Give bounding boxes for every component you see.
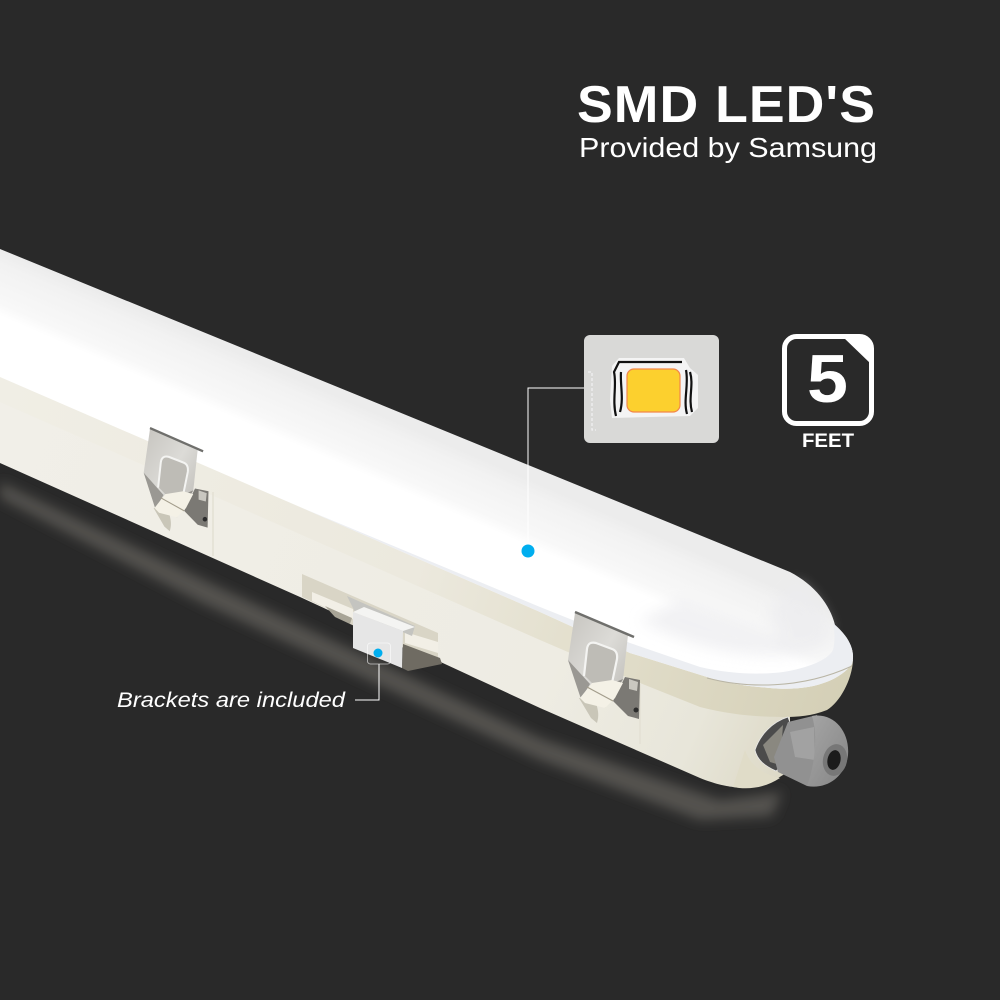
icon numeral: 5 [807,341,848,417]
title: SMD LED'S [577,76,876,134]
chip frame [614,362,692,416]
mounting bracket [347,596,415,668]
subtitle: Provided by Samsung [579,132,877,163]
bracket feet [325,606,352,624]
gland hex ribs [790,727,815,760]
bracket callout box [368,643,390,664]
icon caption: FEET [802,431,854,452]
housing beige band [0,360,853,717]
icon: 5 feet length [784,336,872,452]
LED chip close-up [584,335,719,443]
chip plate [584,335,719,443]
chip callout dot [522,544,534,558]
dome shading [640,582,828,655]
chip callout leader line [528,388,584,551]
flange rim line [707,666,852,685]
bracket slot [302,574,438,662]
housing end lighter cap [733,750,780,788]
gland hex nut [774,715,822,786]
bracket callout leader [355,664,379,700]
bracket label: Brackets are included [117,688,346,712]
icon outline [784,336,872,424]
gland hole [820,742,850,778]
gland dome [807,715,848,787]
left spring clip [144,428,208,531]
bracket rails [312,592,438,653]
floor reflection [0,482,782,820]
diffuser flange [300,507,853,689]
icon corner fold [843,337,871,364]
gland recess [755,717,800,771]
bracket callout dot [374,648,382,658]
gland recess metal [763,725,783,765]
lamp housing body [0,395,790,788]
right spring clip [568,612,640,723]
diffuser cover [0,249,853,689]
housing lower panel seams [213,492,640,744]
chip halo [610,358,698,418]
chip plate trace [588,372,596,430]
lamp [0,249,853,788]
cable gland [774,715,850,787]
chip emitter [627,369,680,412]
bracket lower metal [402,644,442,671]
